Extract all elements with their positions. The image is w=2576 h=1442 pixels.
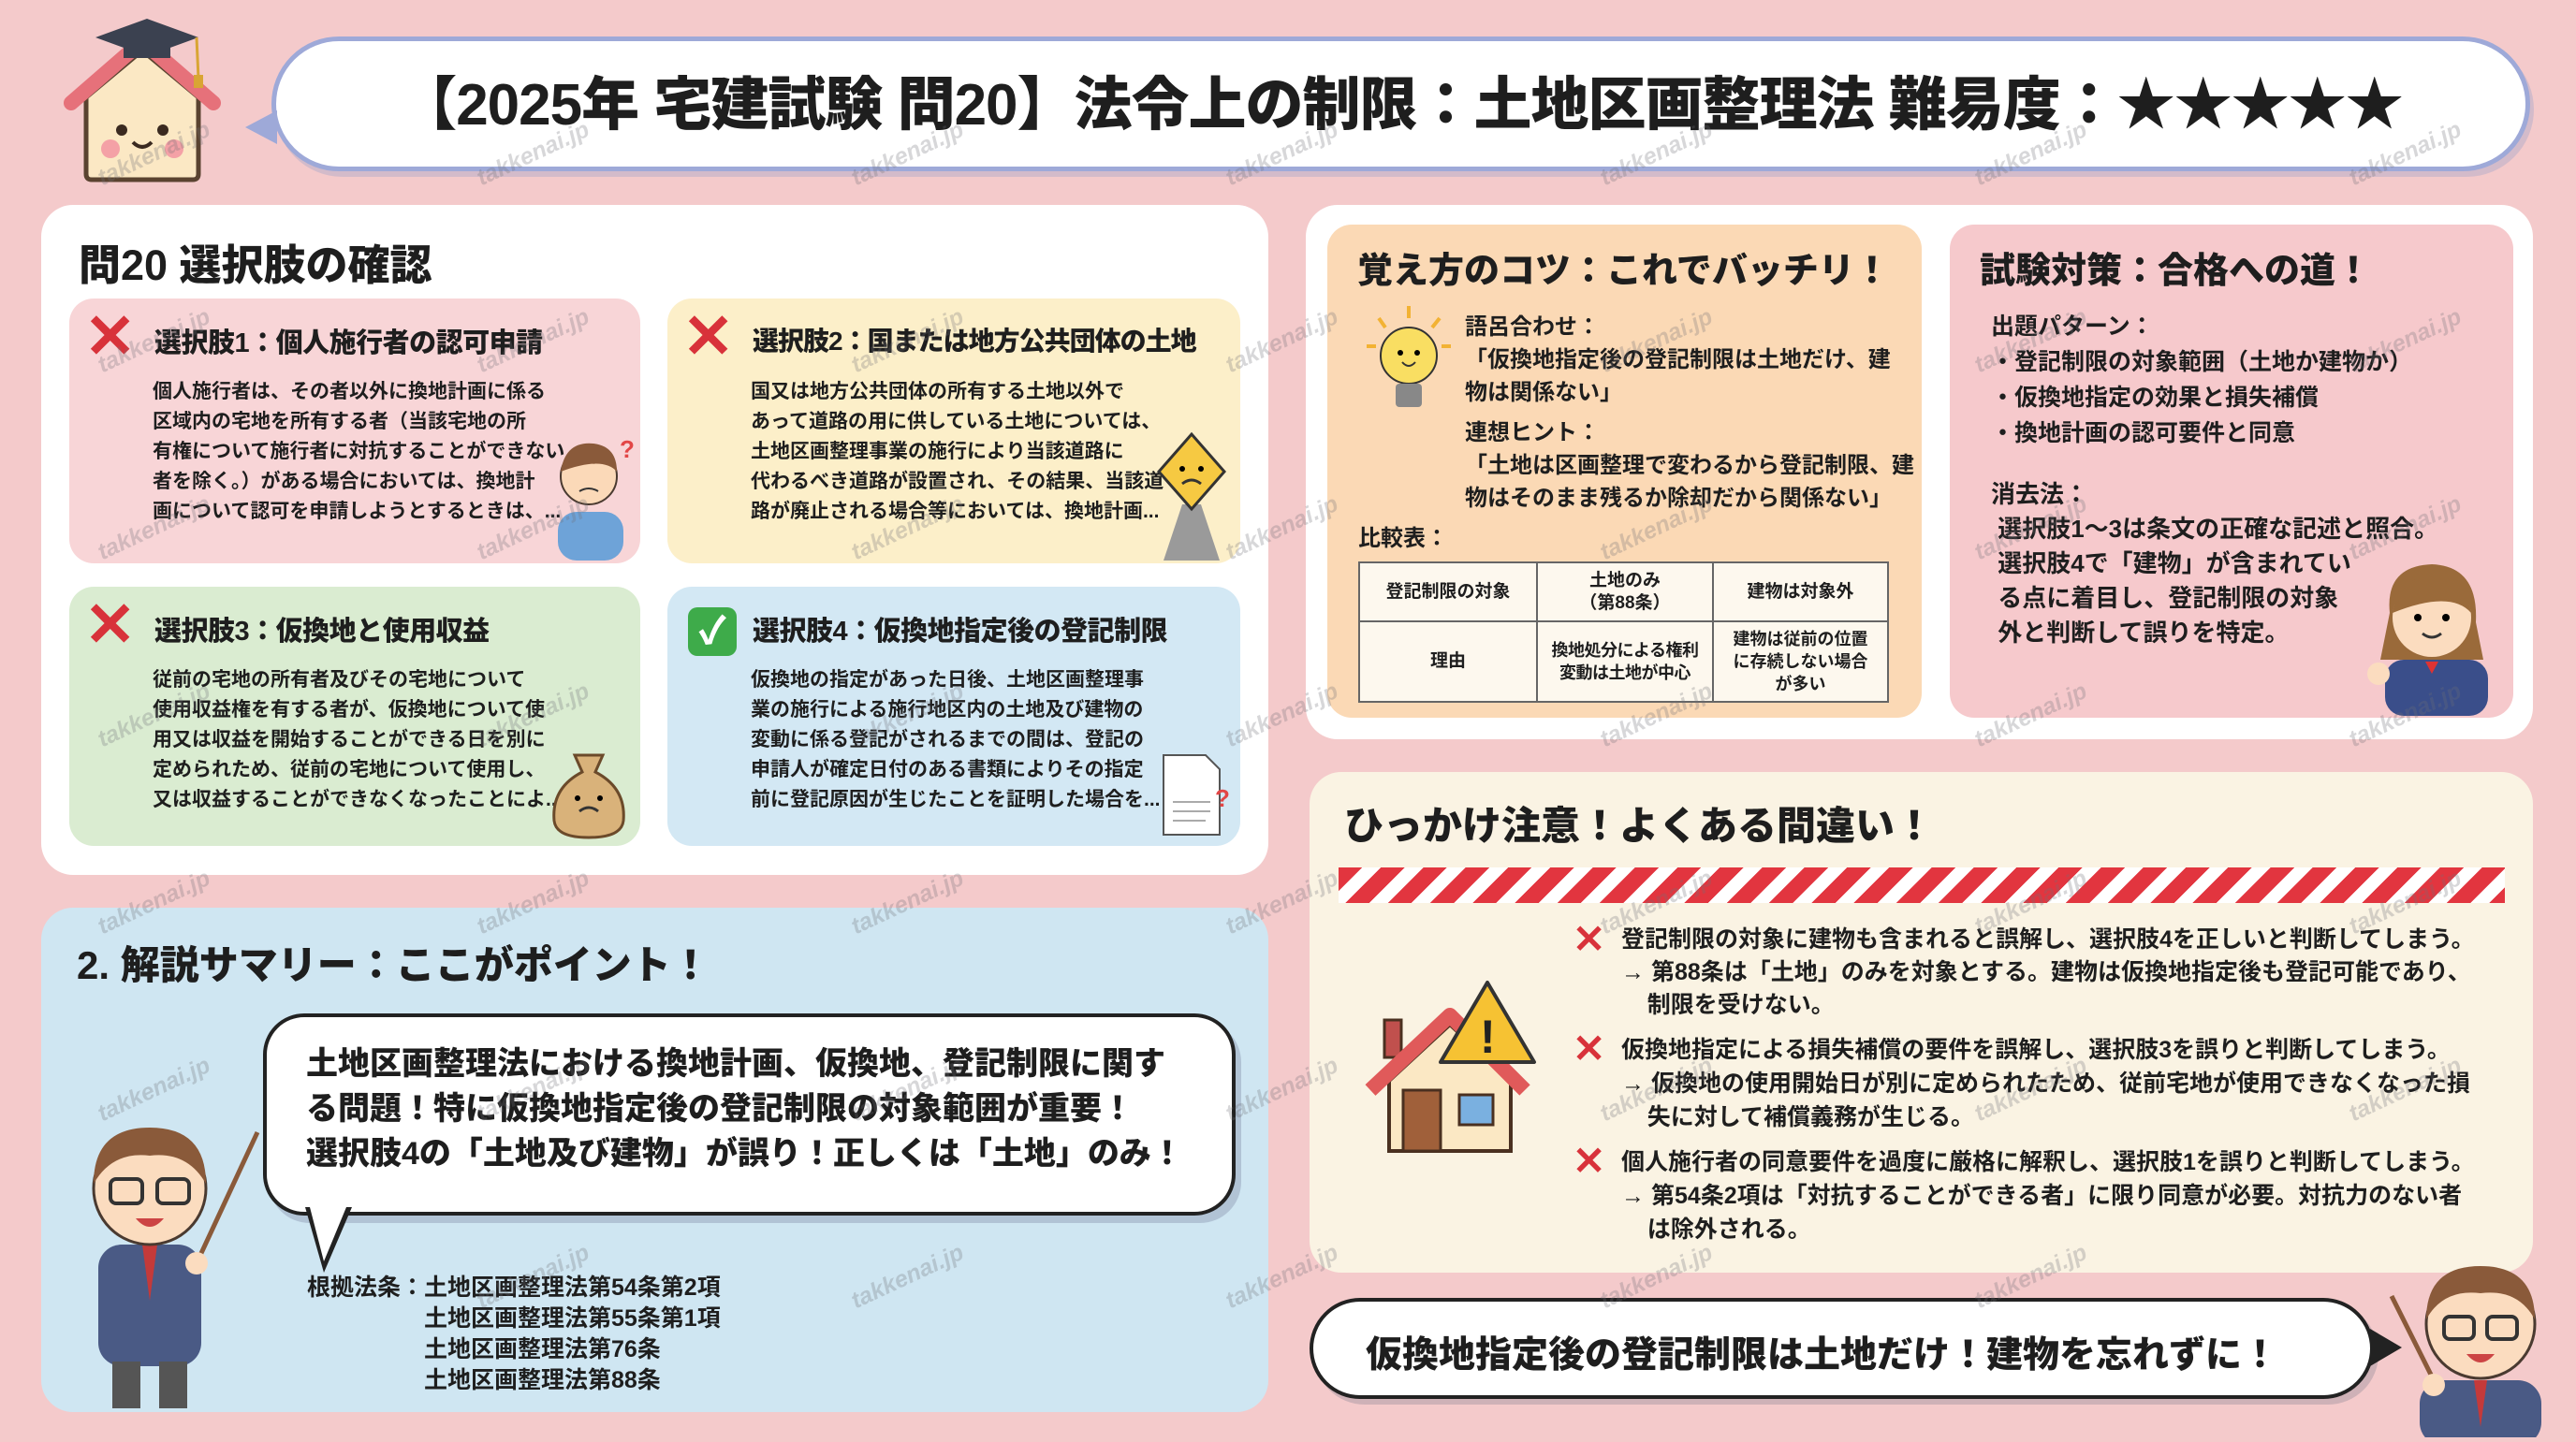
- watermarks: takkenai.jp: [847, 490, 968, 565]
- pitfall items: 個人施行者の同意要件を過度に厳格に解釈し、選択肢1を誤りと判断してしまう。: [1621, 1149, 2475, 1175]
- text: choice 3: 定められため、従前の宅地について使用し、: [153, 759, 545, 780]
- pitfall items: → 第54条2項は「対抗することができる者」に限り同意が必要。対抗力のない者: [1621, 1183, 2462, 1209]
- icon: money bag: [552, 754, 625, 838]
- text: 消去法: 外と判断して誤りを特定。: [1998, 619, 2289, 647]
- watermarks: takkenai.jp: [473, 116, 593, 191]
- text: 語呂合わせ: [1465, 314, 1891, 405]
- stripe band: [1339, 867, 2505, 903]
- text: 連想ヒント: 物はそのまま残るか除却だから関係ない」: [1465, 486, 1892, 511]
- watermarks: takkenai.jp: [1222, 677, 1342, 752]
- watermarks: takkenai.jp: [1970, 1052, 2091, 1127]
- text: 根拠法条: 土地区画整理法第55条第1項: [424, 1305, 721, 1332]
- heading: summary: 2. 解説サマリー：ここがポイント！: [77, 943, 710, 987]
- watermarks: takkenai.jp: [847, 1052, 968, 1127]
- pitfall 2: [1573, 1027, 2470, 1130]
- heading: choice 4: 選択肢4：仮換地指定後の登記制限: [753, 617, 1167, 647]
- watermarks: takkenai.jp: [1596, 1052, 1717, 1127]
- pitfall items: ✕: [1573, 1139, 1605, 1183]
- label: 比較表: 比較表：: [1358, 526, 1448, 551]
- watermarks: takkenai.jp: [473, 1052, 593, 1127]
- watermarks: takkenai.jp: [1222, 116, 1342, 191]
- watermarks: takkenai.jp: [2345, 865, 2466, 939]
- watermarks: takkenai.jp: [2345, 490, 2466, 565]
- text: 語呂合わせ: 物は関係ない」: [1465, 380, 1622, 405]
- text: 出題パターン: ・仮換地指定の効果と損失補償: [1991, 385, 2319, 411]
- text: choice 2: 路が廃止される場合等においては、換地計画...: [751, 501, 1159, 522]
- pitfall items: → 第88条は「土地」のみを対象とする。建物は仮換地指定後も登記可能であり、: [1621, 959, 2471, 985]
- text: 連想ヒント: [1465, 420, 1914, 511]
- text: choice 1: 個人施行者は、その者以外に換地計画に係る: [153, 381, 546, 402]
- text: 消去法: 選択肢4で「建物」が含まれてい: [1998, 549, 2351, 577]
- watermarks: takkenai.jp: [847, 677, 968, 752]
- icon: confused man: ?: [620, 435, 635, 463]
- pitfall items: ✕: [1573, 1027, 1605, 1071]
- speech bubble: summary: る問題！特に仮換地指定後の登記制限の対象範囲が重要！: [306, 1091, 1134, 1127]
- panel: right top white: [1306, 205, 2533, 739]
- panel: ひっかけ注意: [1310, 772, 2533, 1273]
- watermarks: takkenai.jp: [473, 1239, 593, 1314]
- icon: cross 3: ✕: [84, 590, 136, 659]
- icon: house with warning: !: [1480, 1011, 1496, 1063]
- watermarks: takkenai.jp: [1222, 1239, 1342, 1314]
- text: choice 3: [153, 668, 563, 810]
- watermarks: takkenai.jp: [94, 116, 214, 191]
- text: 消去法: る点に着目し、登記制限の対象: [1998, 584, 2338, 612]
- pitfall items: 仮換地指定による損失補償の要件を誤解し、選択肢3を誤りと判断してしまう。: [1621, 1037, 2451, 1063]
- watermarks: takkenai.jp: [2345, 677, 2466, 752]
- pitfall items: 失に対して補償義務が生じる。: [1647, 1104, 1974, 1130]
- icon: house with warning: [1365, 981, 1537, 1153]
- heading: choice 3: 選択肢3：仮換地と使用収益: [154, 617, 490, 647]
- card: 選択肢1: [69, 299, 640, 563]
- watermarks: takkenai.jp: [94, 677, 214, 752]
- text: choice 2: [751, 380, 1164, 522]
- text: 語呂合わせ: 語呂合わせ：: [1465, 314, 1600, 340]
- watermarks: takkenai.jp: [94, 490, 214, 565]
- text: choice 1: 区域内の宅地を所有する者（当該宅地の所: [153, 411, 526, 432]
- table: comparison: [1358, 561, 1889, 703]
- watermarks: takkenai.jp: [1596, 865, 1717, 939]
- icon: cross 1: ✕: [84, 301, 136, 371]
- text: 語呂合わせ: 「仮換地指定後の登記制限は土地だけ、建: [1465, 347, 1891, 372]
- text: 連想ヒント: 「土地は区画整理で変わるから登記制限、建: [1465, 453, 1914, 478]
- text: choice 4: 前に登記原因が生じたことを証明した場合を...: [751, 789, 1161, 810]
- text: 出題パターン: ・換地計画の認可要件と同意: [1991, 420, 2295, 446]
- watermarks: takkenai.jp: [847, 865, 968, 939]
- text: choice 2: 土地区画整理事業の施行により当該道路に: [751, 441, 1124, 462]
- text: 消去法: 消去法：: [1991, 480, 2088, 508]
- title bubble: [271, 36, 2530, 171]
- table: comparison: （第88条）: [1579, 593, 1671, 612]
- text: choice 4: 業の施行による施行地区内の土地及び建物の: [751, 699, 1143, 721]
- watermarks: takkenai.jp: [847, 116, 968, 191]
- text: 出題パターン: ・登記制限の対象範囲（土地か建物か）: [1991, 349, 2412, 375]
- card: 選択肢4: [667, 587, 1240, 846]
- pitfall items: 制限を受けない。: [1647, 992, 1835, 1018]
- icon: house mascot with graduation cap: [64, 19, 221, 182]
- table: comparison: 土地のみ: [1589, 571, 1661, 590]
- illustration: teacher left: [92, 1128, 260, 1408]
- text: choice 2: 国又は地方公共団体の所有する土地以外で: [751, 381, 1124, 402]
- table: comparison: に存続しない場合: [1734, 652, 1868, 671]
- text: choice 1: [153, 380, 564, 522]
- pitfall items: → 仮換地の使用開始日が別に定められたため、従前宅地が使用できなくなった損: [1621, 1071, 2470, 1097]
- text: 根拠法条: [307, 1274, 721, 1393]
- text: choice 4: 申請人が確定日付のある書類によりその指定: [751, 759, 1144, 780]
- watermarks: takkenai.jp: [1970, 865, 2091, 939]
- heading: tips: 覚え方のコツ：これでバッチリ！: [1357, 252, 1890, 291]
- watermarks: takkenai.jp: [1222, 490, 1342, 565]
- pitfall 3: [1573, 1139, 2475, 1243]
- text: choice 4: 変動に係る登記がされるまでの間は、登記の: [751, 729, 1144, 750]
- card: 覚え方のコツ: [1327, 225, 1922, 718]
- speech bubble: summary: [263, 1013, 1236, 1216]
- heading: panel 1: 問20 選択肢の確認: [79, 241, 432, 289]
- heading: choice 1: 選択肢1：個人施行者の認可申請: [154, 328, 543, 358]
- watermarks: takkenai.jp: [1970, 1239, 2091, 1314]
- watermarks: takkenai.jp: [1970, 490, 2091, 565]
- watermarks: takkenai.jp: [1222, 1052, 1342, 1127]
- watermarks: takkenai.jp: [94, 1052, 214, 1127]
- card: 選択肢2: [667, 299, 1240, 563]
- text: choice 3: 又は収益することができなくなったことによ...: [153, 789, 563, 810]
- watermarks: takkenai.jp: [94, 865, 214, 939]
- watermarks: takkenai.jp: [2345, 1052, 2466, 1127]
- watermarks: takkenai.jp: [1596, 490, 1717, 565]
- bottom callout bubble: 仮換地指定後の登記制限は土地だけ！建物を忘れずに！: [1366, 1335, 2278, 1376]
- table: comparison: 登記制限の対象: [1385, 582, 1511, 601]
- watermarks: takkenai.jp: [473, 677, 593, 752]
- icon: road sign: [1157, 432, 1226, 561]
- watermarks: takkenai.jp: [1970, 116, 2091, 191]
- watermarks: takkenai.jp: [473, 490, 593, 565]
- text: 消去法: [1991, 480, 2438, 647]
- text: 消去法: 選択肢1〜3は条文の正確な記述と照合。: [1998, 515, 2438, 543]
- heading: exam strategy: 試験対策：合格への道！: [1980, 252, 2371, 291]
- illustration: student girl: [2367, 564, 2488, 716]
- watermarks: takkenai.jp: [1596, 1239, 1717, 1314]
- text: choice 2: あって道路の用に供している土地については、: [751, 411, 1161, 432]
- watermarks: takkenai.jp: [1222, 865, 1342, 939]
- icon: cross 2: ✕: [682, 301, 734, 371]
- pitfall items: ✕: [1573, 917, 1605, 961]
- bottom callout bubble: [1310, 1298, 2374, 1399]
- heading: choice 2: 選択肢2：国または地方公共団体の土地: [753, 327, 1196, 356]
- illustration: teacher right: [2389, 1266, 2541, 1437]
- watermarks: takkenai.jp: [94, 303, 214, 378]
- watermarks: takkenai.jp: [1970, 677, 2091, 752]
- watermarks: takkenai.jp: [1596, 677, 1717, 752]
- card: 選択肢3: [69, 587, 640, 846]
- watermarks: takkenai.jp: [1596, 116, 1717, 191]
- text: 出題パターン: 出題パターン：: [1991, 313, 2154, 340]
- watermarks: takkenai.jp: [473, 865, 593, 939]
- table: comparison: 建物は従前の位置: [1734, 630, 1868, 648]
- title text: 【2025年 宅建試験 問20】法令上の制限：土地区画整理法 難易度：★★★★★: [399, 73, 2403, 138]
- watermarks: takkenai.jp: [2345, 303, 2466, 378]
- table: comparison: 換地処分による権利: [1552, 641, 1698, 660]
- text: choice 3: 用又は収益を開始することができる日を別に: [153, 729, 546, 750]
- watermarks: takkenai.jp: [473, 303, 593, 378]
- watermarks: takkenai.jp: [2345, 116, 2466, 191]
- text: 根拠法条: 根拠法条：土地区画整理法第54条第2項: [307, 1274, 721, 1301]
- text: choice 4: 仮換地の指定があった日後、土地区画整理事: [751, 669, 1144, 691]
- text: choice 3: 従前の宅地の所有者及びその宅地について: [153, 669, 525, 691]
- panel: 問20 選択肢の確認: [41, 205, 1268, 875]
- text: 出題パターン: [1991, 313, 2412, 446]
- pitfall items: 登記制限の対象に建物も含まれると誤解し、選択肢4を正しいと判断してしまう。: [1621, 926, 2475, 953]
- text: choice 2: 代わるべき道路が設置され、その結果、当該道: [751, 471, 1164, 492]
- watermarks: takkenai.jp: [847, 303, 968, 378]
- pitfall items: [1573, 917, 2475, 1243]
- speech bubble: summary: 選択肢4の「土地及び建物」が誤り！正しくは「土地」のみ！: [306, 1136, 1183, 1172]
- text: choice 3: 使用収益権を有する者が、仮換地について使: [153, 699, 545, 721]
- watermarks: takkenai.jp: [1596, 303, 1717, 378]
- text: choice 4: [751, 668, 1161, 810]
- watermarks: takkenai.jp: [1222, 303, 1342, 378]
- pitfall 1: [1573, 917, 2475, 1018]
- icon: document: ?: [1215, 784, 1230, 812]
- icon: check: [688, 607, 737, 656]
- card: 試験対策: [1950, 225, 2513, 718]
- text: choice 1: 画について認可を申請しようとするときは、...: [153, 501, 561, 522]
- watermarks: takkenai.jp: [847, 1239, 968, 1314]
- table: comparison: 建物は対象外: [1747, 582, 1853, 601]
- speech bubble: summary: 土地区画整理法における換地計画、仮換地、登記制限に関す: [306, 1046, 1165, 1082]
- heading: pitfalls: ひっかけ注意！よくある間違い！: [1344, 804, 1934, 848]
- pitfall items: は除外される。: [1647, 1216, 1811, 1243]
- panel: 解説サマリー: [41, 908, 1268, 1412]
- icon: lightbulb: [1367, 306, 1451, 407]
- icon: confused man: [558, 435, 635, 561]
- text: 根拠法条: 土地区画整理法第88条: [424, 1367, 661, 1393]
- text: choice 1: 有権について施行者に対抗することができない: [153, 441, 564, 462]
- text: choice 1: 者を除く。）がある場合においては、換地計: [153, 471, 534, 492]
- text: 根拠法条: 土地区画整理法第76条: [424, 1336, 661, 1362]
- icon: check: ✓: [698, 611, 726, 652]
- watermarks: takkenai.jp: [1970, 303, 2091, 378]
- icon: document: [1163, 754, 1230, 836]
- text: 連想ヒント: 連想ヒント：: [1465, 420, 1600, 445]
- table: comparison: が多い: [1775, 675, 1825, 693]
- table: comparison: 理由: [1430, 651, 1466, 671]
- table: comparison: 変動は土地が中心: [1559, 663, 1690, 682]
